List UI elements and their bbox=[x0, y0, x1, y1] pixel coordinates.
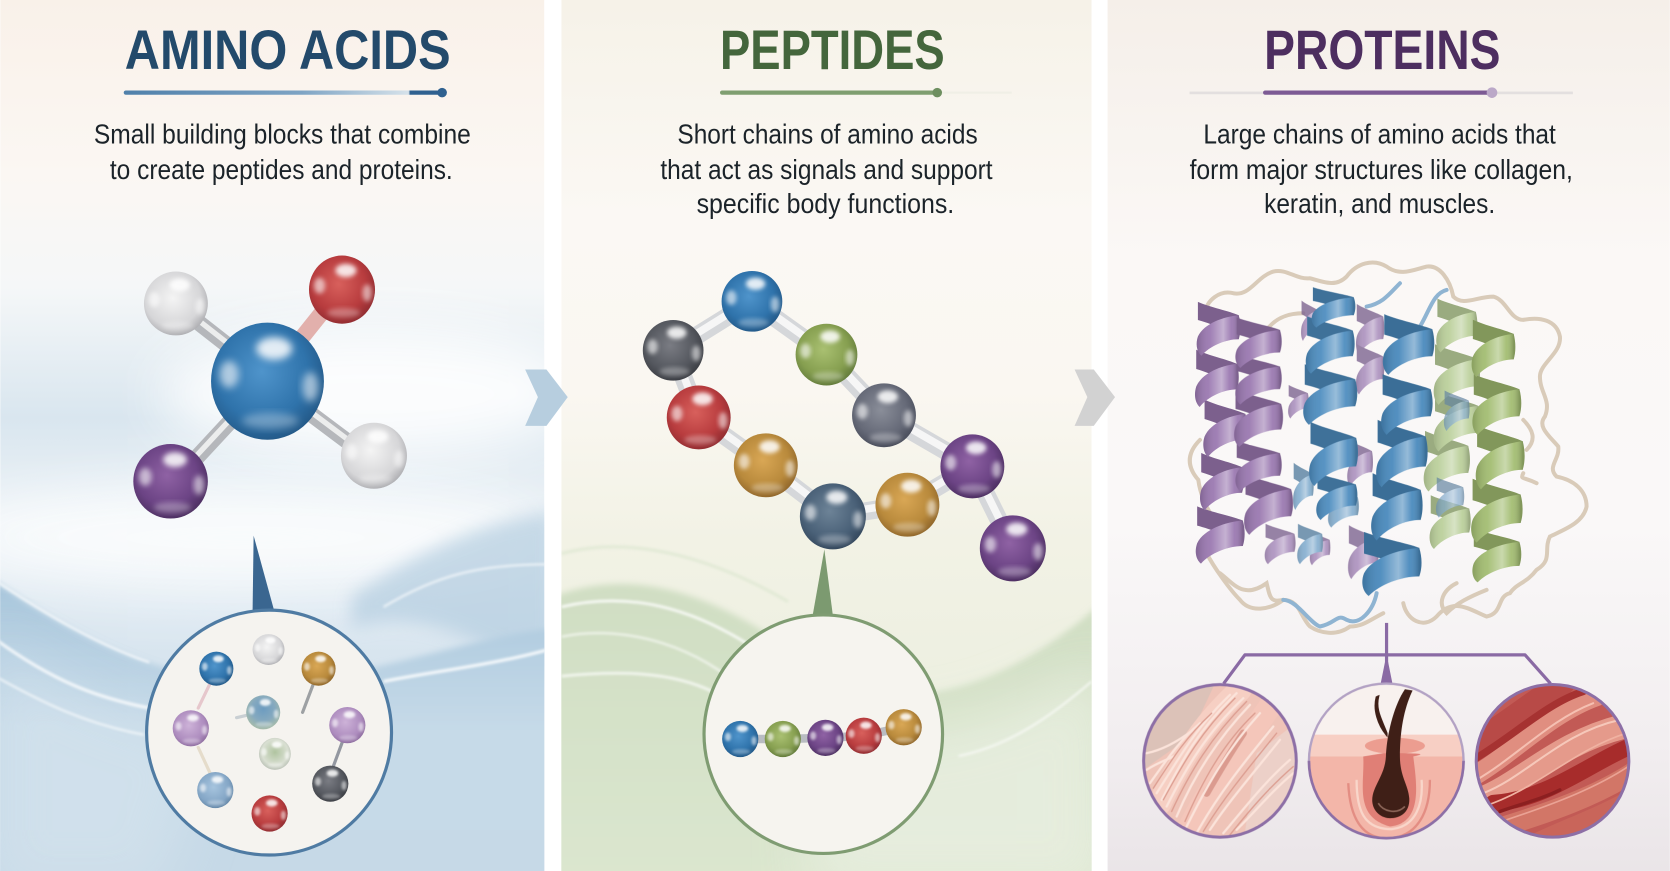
description bbox=[94, 119, 471, 185]
helix: background blue and purple bbox=[1265, 301, 1384, 579]
description bbox=[1190, 119, 1573, 219]
panel: amino acids bbox=[0, 0, 586, 871]
circle: collagen bbox=[1140, 680, 1300, 843]
background: blue water bbox=[0, 0, 586, 871]
helix: back green bbox=[1424, 299, 1480, 549]
arrow: peptides to proteins bbox=[1075, 369, 1115, 426]
title underline bbox=[1190, 87, 1573, 98]
title underline bbox=[720, 88, 1012, 97]
callout pointer bbox=[253, 536, 275, 613]
description: to create peptides and proteins. bbox=[110, 154, 453, 185]
description: Large chains of amino acids that bbox=[1203, 119, 1556, 150]
description: that act as signals and support bbox=[660, 154, 993, 185]
protein ribbon structure bbox=[1190, 262, 1587, 633]
background bbox=[1108, 0, 1670, 871]
title: peptides: PEPTIDES bbox=[720, 19, 945, 81]
helix: blue right bbox=[1362, 314, 1434, 596]
circle: keratin hair follicle bbox=[1307, 680, 1467, 845]
background: green water bbox=[554, 0, 1108, 871]
title: amino acids: AMINO ACIDS bbox=[125, 19, 451, 81]
title: proteins: PROTEINS bbox=[1264, 19, 1500, 81]
tissue circles bbox=[1140, 680, 1637, 846]
description bbox=[660, 119, 993, 219]
callout pointer bbox=[813, 549, 833, 615]
circle: muscle fibres bbox=[1474, 683, 1630, 839]
description: specific body functions. bbox=[697, 188, 954, 219]
helix: green front bbox=[1471, 320, 1525, 582]
loops: blue bbox=[1283, 283, 1447, 627]
zoom circle: free amino acids bbox=[147, 610, 392, 855]
amino acid molecule bbox=[133, 256, 407, 519]
zoom circle: short chain bbox=[704, 615, 943, 853]
description: keratin, and muscles. bbox=[1264, 188, 1495, 219]
title underline bbox=[124, 88, 447, 97]
helix: blue left bbox=[1303, 287, 1358, 520]
coil loops bbox=[1190, 262, 1587, 633]
helix: purple right bbox=[1234, 317, 1293, 535]
panel: proteins bbox=[1108, 0, 1670, 871]
connector lines bbox=[1224, 623, 1551, 684]
description: Short chains of amino acids bbox=[677, 119, 978, 150]
description: Small building blocks that combine bbox=[94, 119, 471, 150]
peptide chain molecule bbox=[643, 271, 1046, 581]
helix: purple left bbox=[1195, 302, 1247, 564]
description: form major structures like collagen, bbox=[1190, 154, 1573, 185]
arrow: amino acids to peptides bbox=[525, 369, 568, 426]
panel: peptides bbox=[554, 0, 1108, 871]
